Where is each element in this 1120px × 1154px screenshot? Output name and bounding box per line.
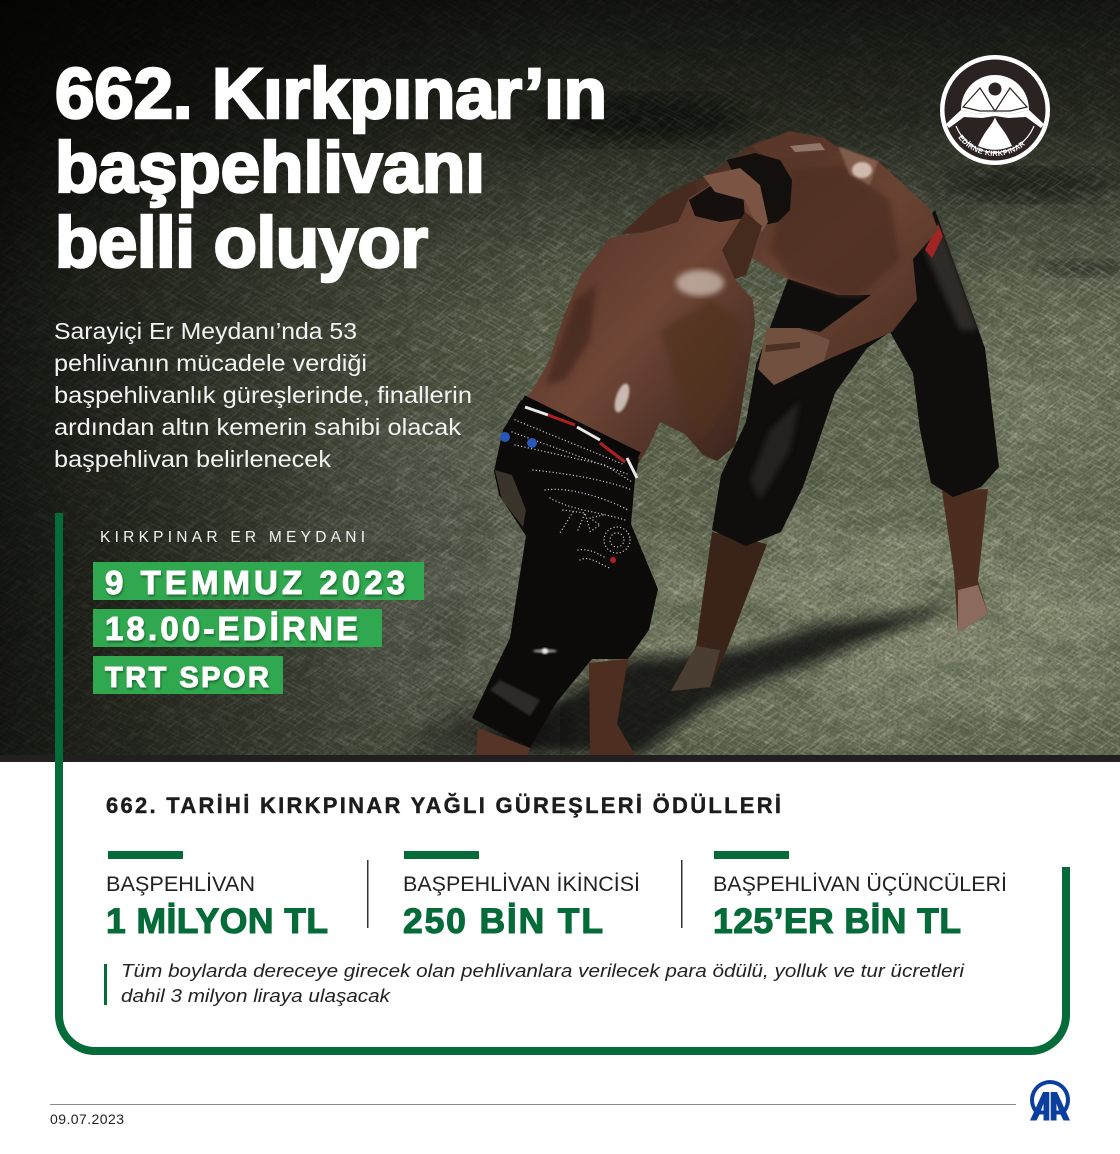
prize: champion: BAŞPEHLİVAN [106,873,255,896]
panel: hero photo of two oil wrestlers on grass [0,0,1120,755]
prize: runner-up: 250 BİN TL [403,901,603,941]
ground shadow [470,606,953,755]
prize note [104,960,965,1006]
venue label: KIRKPINAR ER MEYDANI [100,529,365,546]
decorated waistband of the trunks [500,399,639,568]
logo: Edirne Kırkpınar: EDİRNE KIRKPINAR [958,134,1026,156]
title: belli oluyor [55,204,428,283]
prize: third places [713,851,1007,941]
prize: runner-up [403,851,640,941]
intro paragraph [54,318,472,472]
title: başpehlivanı [55,129,485,208]
event date tag: 9 TEMMUZ 2023 [105,564,405,601]
prize: third places: 125’ER BİN TL [713,901,961,941]
intro paragraph: Sarayiçi Er Meydanı’nda 53 [54,318,357,344]
prize: champion: 1 MİLYON TL [106,901,328,941]
green frame [59,513,1066,1051]
left wrestler [472,168,768,755]
intro paragraph: ardından altın kemerin sahibi olacak [54,414,462,440]
icon: AA logo [1030,1080,1070,1120]
title: 662. Kırkpınar’ın [55,55,607,134]
prize: third places: BAŞPEHLİVAN ÜÇÜNCÜLERİ [713,873,1007,896]
prizes heading: 662. TARİHİ KIRKPINAR YAĞLI GÜREŞLERİ ÖDÜLLERİ [106,793,781,818]
dark strip under photo [0,755,1120,762]
prize: champion [106,851,328,941]
logo: Edirne Kırkpınar [940,55,1050,165]
intro paragraph: başpehlivanlık güreşlerinde, finallerin [54,382,472,408]
prize: runner-up: BAŞPEHLİVAN İKİNCİSİ [403,873,640,896]
broadcaster tag: TRT SPOR [105,662,269,694]
grass background [0,0,1120,755]
event time and place tag: 18.00-EDİRNE [105,610,358,647]
prize note: Tüm boylarda dereceye girecek olan pehlivanlara verilecek para ödülü, yolluk ve tur ücretleri [121,960,965,981]
intro paragraph: pehlivanın mücadele verdiği [54,350,367,376]
title [55,55,607,283]
prize note: dahil 3 milyon liraya ulaşacak [121,985,392,1006]
intro paragraph: başpehlivan belirlenecek [54,446,332,472]
date: 09.07.2023 [50,1111,124,1127]
right wrestler [621,131,999,691]
